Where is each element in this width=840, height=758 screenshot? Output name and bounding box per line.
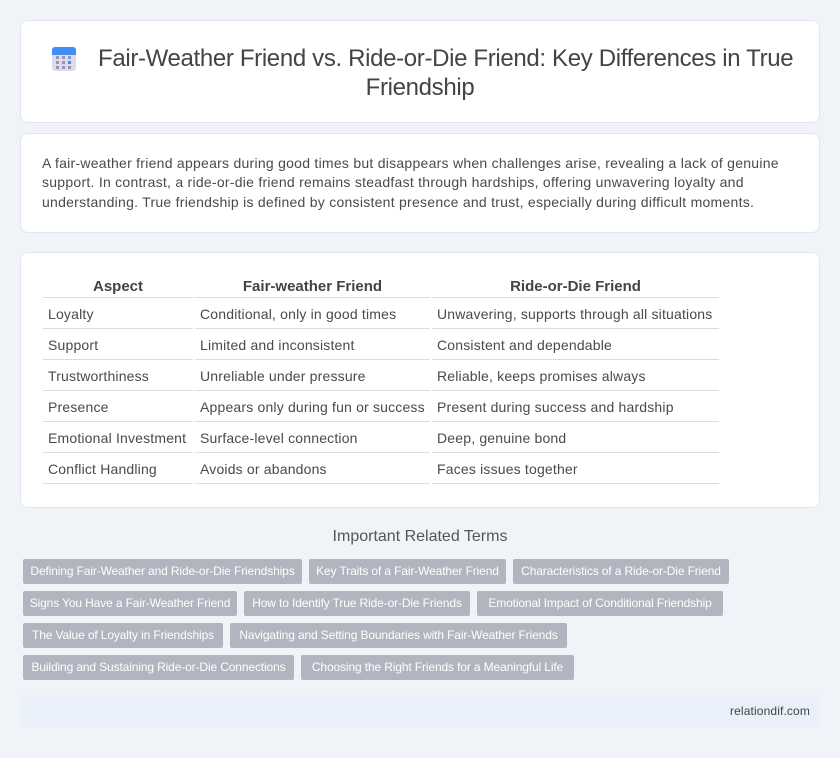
table heading row: Ride-or-Die Friend	[510, 278, 641, 295]
title: Friendship	[366, 74, 474, 101]
title: Fair-Weather Friend vs. Ride-or-Die Friend: Key Differences in True	[98, 45, 793, 72]
tag list: related terms: Navigating and Setting Boundaries with Fair-Weather Friends	[239, 628, 558, 642]
row: Conflict Handling: Conflict Handling	[48, 461, 157, 477]
row: Conflict Handling: Avoids or abandons	[200, 461, 327, 477]
intro paragraph: A fair-weather friend appears during good times but disappears when challenges arise, revealing a lack of genuine	[42, 155, 779, 171]
tag list: related terms	[23, 559, 729, 680]
icon: calendar	[52, 47, 76, 71]
row: Trustworthiness: Trustworthiness	[48, 368, 149, 384]
row: Emotional Investment: Surface-level connection	[200, 430, 358, 446]
row: Presence: Present during success and hardship	[437, 399, 674, 415]
row: Loyalty: Unwavering, supports through all situations	[437, 306, 712, 322]
tag list: related terms: Defining Fair-Weather and Ride-or-Die Friendships	[30, 564, 295, 578]
table heading row: Fair-weather Friend	[243, 278, 382, 295]
row: Emotional Investment	[48, 430, 566, 446]
intro paragraph: understanding. True friendship is defined by consistent presence and trust, especially during difficult moments.	[42, 194, 754, 210]
row: Presence: Presence	[48, 399, 109, 415]
row: Support	[48, 337, 612, 353]
row: Trustworthiness: Unreliable under pressure	[200, 368, 366, 384]
row: Trustworthiness: Reliable, keeps promises always	[437, 368, 646, 384]
row: Support: Consistent and dependable	[437, 337, 612, 353]
title	[98, 45, 793, 101]
row: Emotional Investment: Deep, genuine bond	[437, 430, 566, 446]
row: Conflict Handling	[48, 461, 578, 477]
tag list: related terms: Characteristics of a Ride-or-Die Friend	[521, 564, 721, 578]
row: Support: Support	[48, 337, 98, 353]
row: Loyalty: Conditional, only in good times	[200, 306, 396, 322]
tag list: related terms: Emotional Impact of Conditional Friendship	[488, 596, 712, 610]
row: Presence: Appears only during fun or success	[200, 399, 425, 415]
row: Emotional Investment: Emotional Investment	[48, 430, 186, 446]
panel: header	[20, 20, 820, 123]
footer bar	[20, 695, 820, 727]
tag list: related terms: Building and Sustaining Ride-or-Die Connections	[31, 660, 286, 674]
intro paragraph	[42, 155, 779, 210]
panel: comparison table	[20, 252, 820, 508]
tag list: related terms: How to Identify True Ride-or-Die Friends	[252, 596, 462, 610]
footer credit: relationdif.com	[730, 704, 810, 718]
row: Presence	[48, 399, 674, 415]
tag list: related terms: Choosing the Right Friends for a Meaningful Life	[312, 660, 563, 674]
row: Loyalty	[48, 306, 712, 322]
row: Loyalty: Loyalty	[48, 306, 94, 322]
table heading row: Aspect	[93, 278, 143, 295]
heading: related terms: Important Related Terms	[333, 528, 507, 545]
row: Conflict Handling: Faces issues together	[437, 461, 578, 477]
table heading row	[93, 278, 641, 295]
intro paragraph: support. In contrast, a ride-or-die friend remains steadfast through hardships, offering unwavering loyalty and	[42, 174, 744, 190]
tag list: related terms: Key Traits of a Fair-Weather Friend	[316, 564, 499, 578]
panel: intro text	[20, 133, 820, 233]
row: Support: Limited and inconsistent	[200, 337, 355, 353]
tag list: related terms: The Value of Loyalty in Friendships	[32, 628, 214, 642]
row: Trustworthiness	[48, 368, 646, 384]
tag list: related terms: Signs You Have a Fair-Weather Friend	[30, 596, 230, 610]
